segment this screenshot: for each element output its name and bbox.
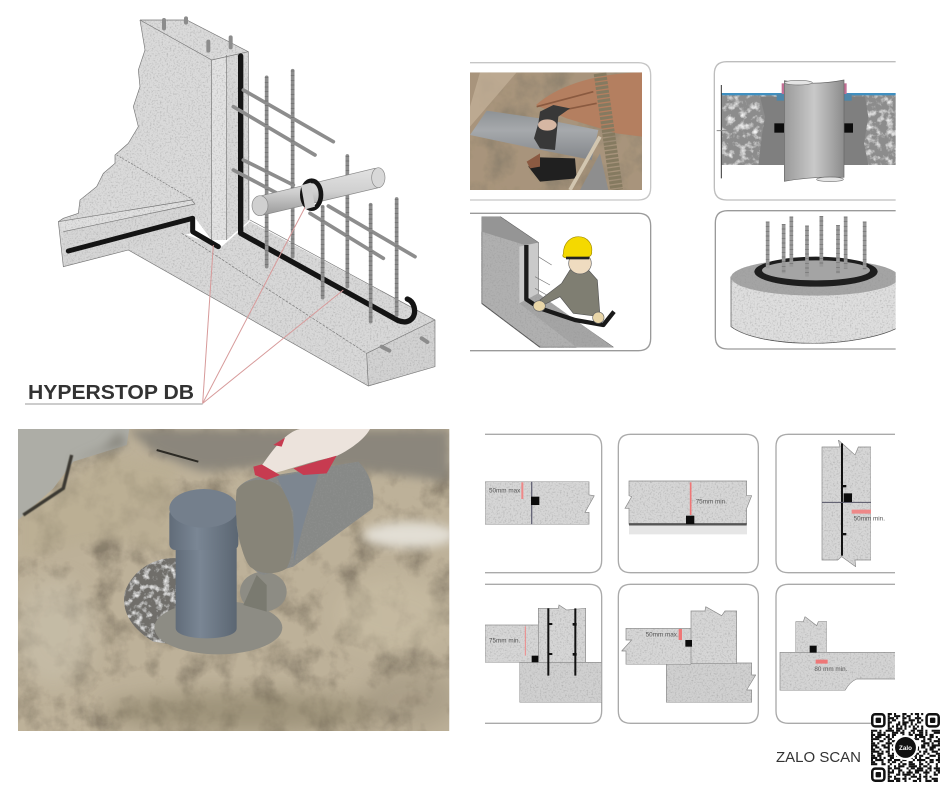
panels: placement details (485, 434, 896, 723)
gloved hand (253, 429, 370, 480)
panel: hand wrapping pipe photo (470, 63, 651, 200)
panel: wall on slab 80mm (776, 584, 896, 723)
label: ZALO SCAN: ZALO SCAN (776, 750, 861, 766)
label: HYPERSTOP DB: HYPERSTOP DB (28, 381, 194, 404)
rebar ribs (267, 71, 397, 322)
black waterstop strip (68, 56, 415, 322)
tilted bucket (236, 462, 373, 612)
panel: worker fixing strip (470, 213, 651, 351)
broken aggregate ring (124, 558, 287, 645)
cement collar (154, 601, 282, 654)
panel: kicker with rebars 75mm: 75mm min. (489, 637, 521, 644)
PVC pipe body (169, 489, 238, 638)
panel: wall on slab 80mm: 80 mm min. (814, 666, 848, 673)
ground tone patches (13, 429, 457, 732)
rebar mesh back (233, 71, 415, 322)
wall dowel stubs (164, 18, 427, 351)
pipe through wall (252, 168, 385, 216)
panel: pipe section through slab (714, 62, 897, 200)
panels: waterstop application illustrations (470, 62, 899, 351)
red leader lines (203, 207, 343, 403)
photo: pouring grout around PVC pipe (13, 429, 457, 732)
panel: stepped joint 50mm: 50mm max. (646, 632, 679, 639)
diagram: foundation wall with HYPERSTOP DB waterstop (25, 18, 435, 404)
panel: joint detail 50mm: 50mm max (489, 487, 521, 494)
QR code: Zalo (899, 745, 912, 752)
panel: slab base detail 75mm (618, 434, 758, 573)
concrete wall and slab (58, 20, 435, 386)
panel: joint detail 50mm (485, 434, 602, 573)
concrete edge lines (58, 20, 435, 386)
panel: wall joint detail 50mm (776, 434, 895, 573)
panel: kicker with rebars 75mm (485, 584, 602, 723)
concrete wall corner (18, 429, 198, 520)
panel: wall joint detail 50mm: 50mm min. (854, 516, 885, 523)
QR code (871, 713, 940, 782)
panel: circular footing with rebars (715, 211, 899, 349)
panel: slab base detail 75mm: 75mm min. (696, 499, 727, 506)
panel: stepped joint 50mm (618, 584, 758, 723)
